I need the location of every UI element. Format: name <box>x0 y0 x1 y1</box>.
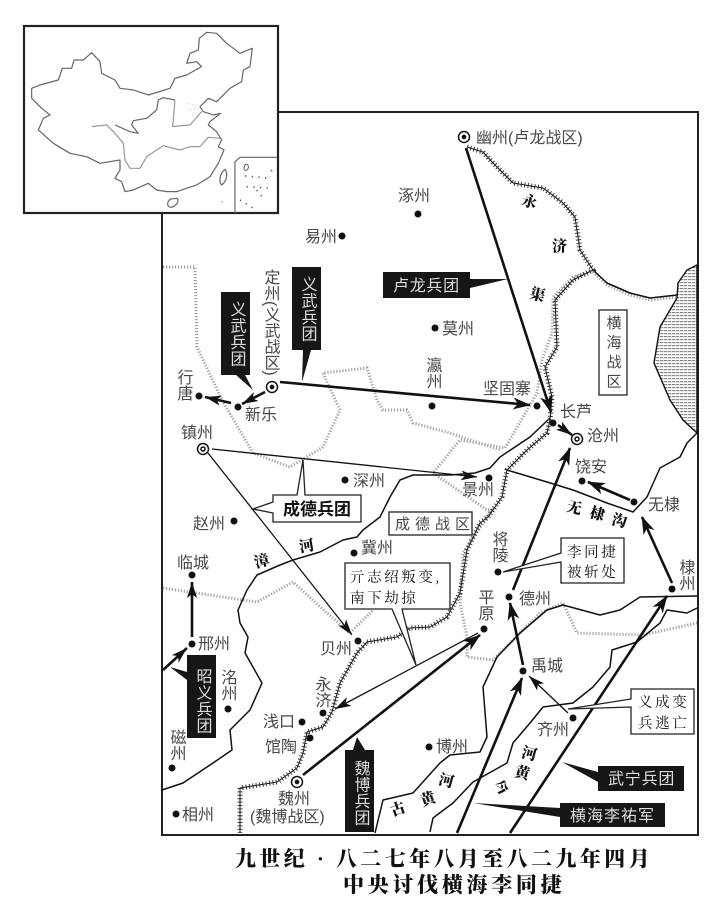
title: 中央讨伐横海李同捷 <box>343 873 565 897</box>
place names: 赵州 <box>193 515 225 533</box>
label: Chengde corps: 成德兵团 <box>283 499 351 519</box>
place names: 棣州 <box>676 559 696 591</box>
label: Yiwu corps (right): 义武兵团 <box>298 276 318 342</box>
place names: 浅口 <box>263 713 295 731</box>
callout: Qi Zhishao mutiny <box>345 563 450 665</box>
river and canal names: 黄 <box>418 787 441 810</box>
river and canal names <box>252 191 629 820</box>
label: Henghai war zone <box>599 310 627 395</box>
callout: Li Tongjie executed: 李同捷 <box>567 543 618 561</box>
place names: 冀州 <box>361 539 393 557</box>
place names: 易州 <box>305 229 337 246</box>
label: Yiwu corps (left) <box>221 292 253 390</box>
place names: 齐州 <box>537 721 569 739</box>
place names: 深州 <box>353 472 385 490</box>
place names: 涿州 <box>398 187 430 205</box>
river and canal names: 济 <box>552 237 567 255</box>
callout: Li Tongjie executed: 被斩处 <box>567 564 618 581</box>
title: 九世纪 · 八二七年八月至八二九年四月 <box>235 847 653 871</box>
place names: 邢州 <box>198 635 230 653</box>
place names <box>168 129 696 826</box>
place names: 瀛州 <box>424 356 442 389</box>
place names: 洺州 <box>218 669 238 701</box>
place names: 景州 <box>462 482 494 499</box>
city markers <box>168 210 676 818</box>
place names: 磁州 <box>168 729 186 761</box>
place names: 禹城 <box>531 657 563 675</box>
headquarters markers <box>198 132 582 788</box>
river and canal names: 河 <box>298 537 316 556</box>
place names: 平原 <box>476 589 494 621</box>
place names: 行唐 <box>174 369 194 401</box>
river and canal names: 棣 <box>588 503 607 524</box>
place names: 沧州 <box>587 427 619 445</box>
river and canal names: 无 <box>565 497 584 518</box>
river and canal names: 河 <box>437 771 456 791</box>
place names: 新乐 <box>245 406 277 424</box>
place names: 将陵 <box>490 531 508 563</box>
river and canal names: 沟 <box>610 510 629 531</box>
label: Chengde corps <box>253 460 361 522</box>
inset: map of China <box>24 26 278 213</box>
place names: 饶安 <box>575 458 607 476</box>
label: Henghai war zone: 横海战区 <box>604 315 622 393</box>
place names: 定州(义武战区) <box>262 269 280 376</box>
place names: 博州 <box>436 738 468 756</box>
place names: 无棣 <box>648 496 680 514</box>
label: Lulong corps <box>383 272 508 298</box>
label: Henghai Li You army <box>473 803 665 827</box>
river and canal names: 渠 <box>528 284 547 306</box>
place names: (魏博战区) <box>250 808 325 826</box>
label: Zhaoyi corps: 昭义兵团 <box>194 668 212 734</box>
label: Zhaoyi corps <box>170 655 216 738</box>
label: Chengde war zone <box>389 512 475 535</box>
place names: 坚固寨 <box>483 380 531 398</box>
label: Wuning corps: 武宁兵团 <box>608 770 675 788</box>
place names: 贝州 <box>320 641 352 658</box>
place names: 相州 <box>182 806 214 824</box>
place names: 幽州(卢龙战区) <box>476 129 583 147</box>
label: Weibo corps: 魏博兵团 <box>352 760 370 826</box>
river and canal names: 古 <box>388 798 408 820</box>
label: Lulong corps: 卢龙兵团 <box>393 277 460 295</box>
label: Weibo corps <box>345 737 374 832</box>
callout: Qi Zhishao mutiny: 南下劫掠 <box>350 590 418 607</box>
rivers and coast <box>162 270 697 833</box>
place names: 长芦 <box>560 403 592 421</box>
river and canal names: 黄 <box>513 762 535 784</box>
river and canal names: 漳 <box>252 550 271 572</box>
place names: 德州 <box>519 590 551 608</box>
callout: Li Tongjie executed <box>503 538 624 583</box>
label: Henghai Li You army: 横海李祐军 <box>570 807 655 825</box>
callout: Qi Zhishao mutiny: 亓志绍叛变, <box>350 569 442 586</box>
callout: Yicheng troops flee: 兵逃亡 <box>638 715 689 732</box>
dotted boundaries of war zones <box>163 267 697 660</box>
callout: Yicheng troops flee: 义成变 <box>638 694 689 711</box>
sea area <box>654 265 697 433</box>
canal: hatched Yongji canal <box>240 147 593 833</box>
place names: 莫州 <box>442 320 474 338</box>
label: Yiwu corps (left): 义武兵团 <box>228 301 246 367</box>
label: Chengde war zone: 成德战区 <box>395 515 475 533</box>
place names: 馆陶 <box>265 738 297 756</box>
river and canal names: 永 <box>520 191 539 213</box>
callout: Yicheng troops flee <box>568 689 694 734</box>
label: Yiwu corps (right) <box>292 267 321 382</box>
river and canal names: 河 <box>520 744 539 764</box>
place names: 镇州 <box>181 424 213 442</box>
title <box>235 847 653 897</box>
place names: 永济 <box>312 676 332 708</box>
label: Wuning corps <box>562 762 684 791</box>
place names: 魏州 <box>278 790 310 808</box>
arrows: troop movements <box>163 148 672 833</box>
river and canal names: 今 <box>490 776 512 799</box>
panel: main map frame <box>162 112 698 835</box>
place names: 临城 <box>177 554 209 572</box>
